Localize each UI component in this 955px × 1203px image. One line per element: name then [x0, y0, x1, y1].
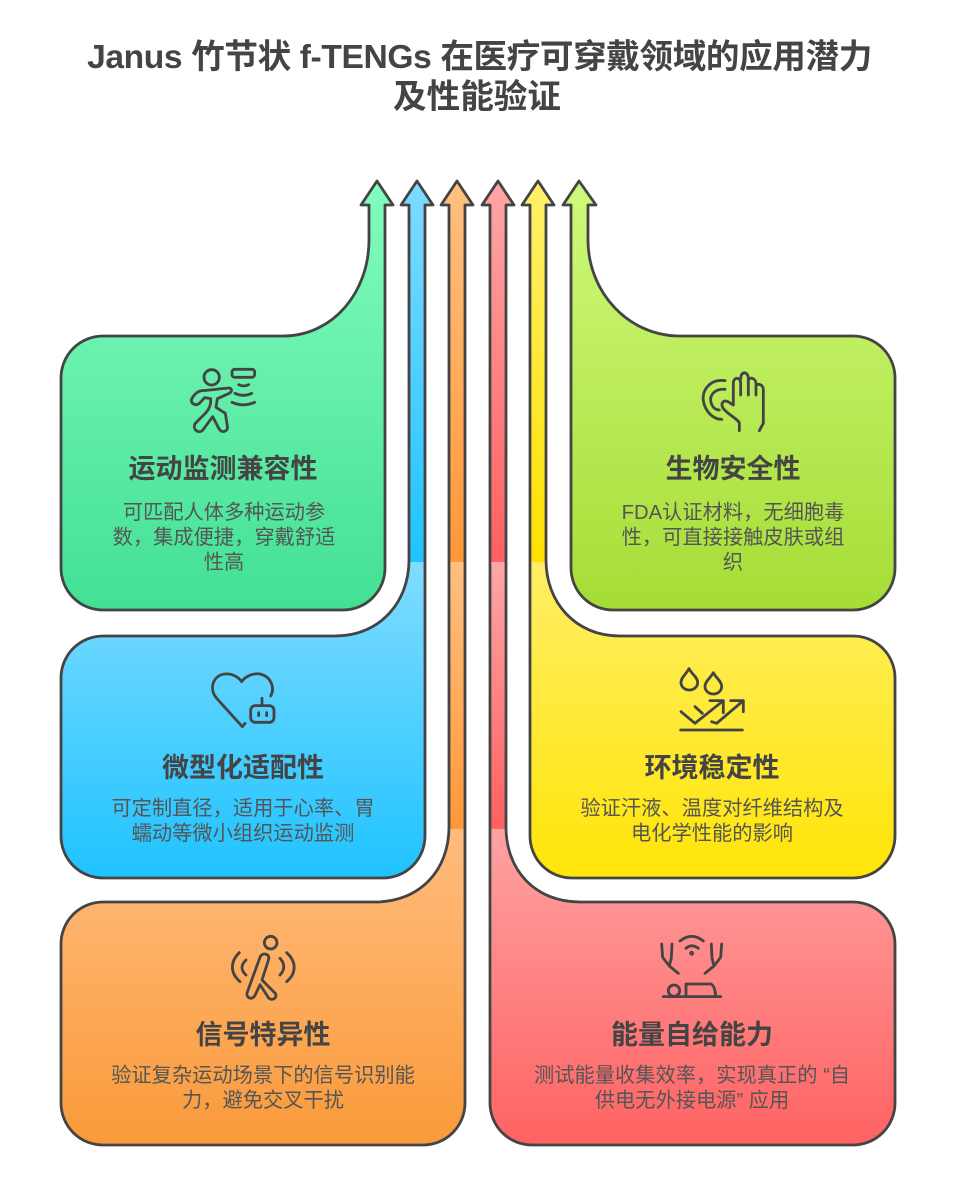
heading: 生物安全性: [666, 454, 800, 484]
icon: runner with sensor: [191, 369, 255, 432]
icon: hand touching skin: [703, 373, 763, 431]
body text: 可定制直径，适用于心率、胃: [111, 797, 375, 820]
heading: 微型化适配性: [162, 753, 324, 783]
heading: 运动监测兼容性: [128, 454, 318, 484]
title: Janus 竹节状 f-TENGs 在医疗可穿戴领域的应用潜力: [87, 38, 872, 76]
body text: 测试能量收集效率，实现真正的 “自: [534, 1064, 850, 1087]
body text: 供电无外接电源” 应用: [595, 1089, 789, 1112]
body text: [580, 797, 844, 845]
panel: 生物安全性: [563, 181, 895, 610]
body text: 性高: [204, 551, 244, 574]
panel: 运动监测兼容性: [61, 181, 393, 610]
body text: 织: [723, 551, 743, 574]
arrow and card: yellow: [522, 181, 895, 878]
panel: 环境稳定性: [522, 181, 895, 878]
body text: 验证复杂运动场景下的信号识别能: [111, 1064, 415, 1087]
body text: 蠕动等微小组织运动监测: [132, 822, 354, 845]
icon: droplets and rising arrows: [681, 669, 743, 730]
arrow and card: red: [482, 181, 895, 1145]
panel: 能量自给能力: [482, 181, 895, 1145]
icon: hands with wifi and device: [662, 936, 722, 997]
body text: [113, 501, 335, 574]
title: 及性能验证: [393, 78, 561, 116]
panel: 微型化适配性: [61, 181, 433, 878]
heading: 信号特异性: [196, 1020, 330, 1050]
body text: [534, 1064, 850, 1112]
body text: 力，避免交叉干扰: [182, 1089, 344, 1112]
heading: 环境稳定性: [644, 753, 780, 783]
body text: [622, 501, 844, 574]
arrow and card: orange: [61, 181, 473, 1145]
body text: 验证汗液、温度对纤维结构及: [580, 797, 844, 820]
body text: [111, 797, 375, 845]
body text: 可匹配人体多种运动参: [123, 501, 325, 524]
heading: 能量自给能力: [611, 1020, 773, 1050]
body text: [111, 1064, 415, 1112]
icon: person with signal waves: [232, 936, 294, 999]
body text: 数，集成便捷，穿戴舒适: [113, 526, 335, 549]
panel: 信号特异性: [61, 181, 473, 1145]
body text: 电化学性能的影响: [631, 822, 793, 845]
body text: 性，可直接接触皮肤或组: [622, 526, 844, 549]
icon: heart with robot: [213, 674, 274, 727]
body text: FDA认证材料，无细胞毒: [622, 501, 844, 524]
arrow and card: blue: [61, 181, 433, 878]
arrow and card: lime: [563, 181, 895, 610]
title: [87, 38, 872, 116]
arrow and card: green: [61, 181, 393, 610]
